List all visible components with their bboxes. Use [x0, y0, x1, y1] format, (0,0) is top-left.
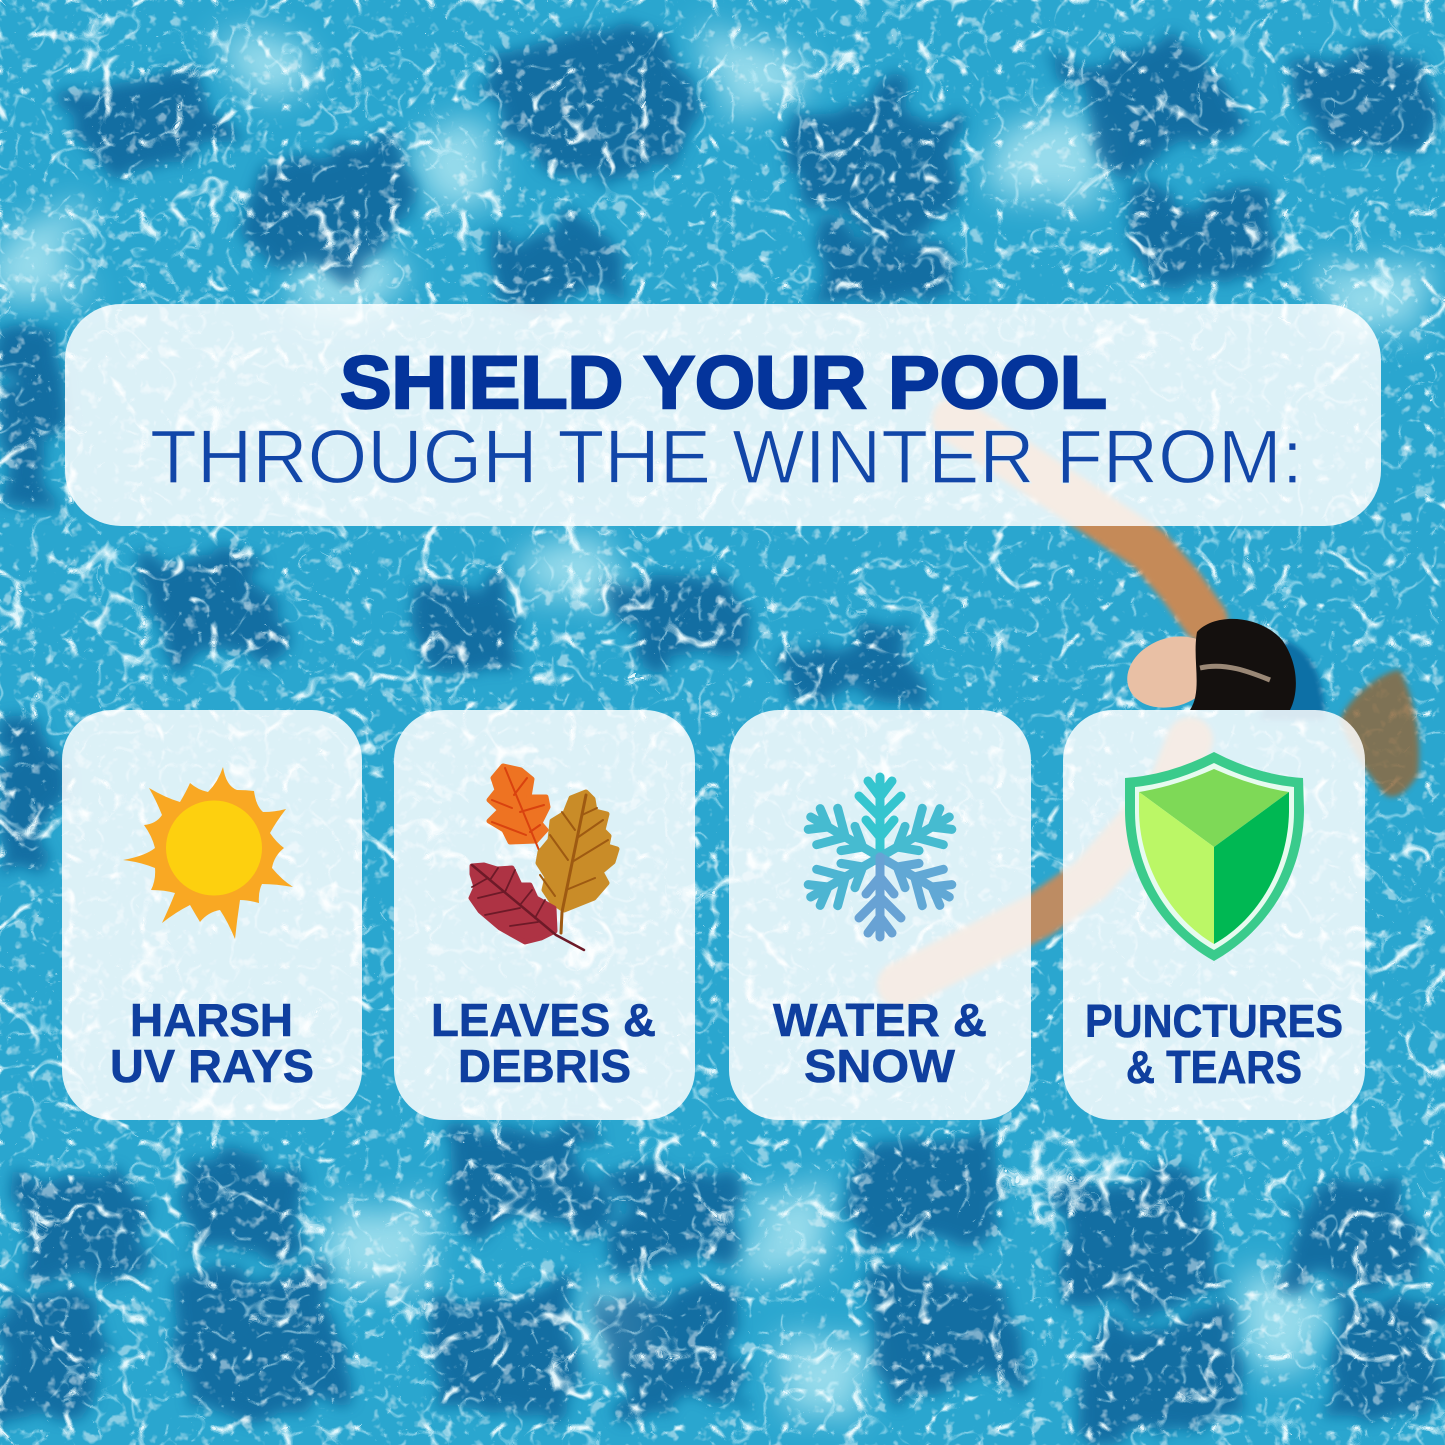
- label: water and snow: WATER &: [773, 994, 987, 1046]
- panel: water and snow: [729, 710, 1031, 1120]
- heading: shield your pool: SHIELD YOUR POOL: [340, 341, 1107, 424]
- panel: harsh uv rays: [62, 710, 362, 1120]
- label: harsh uv rays: HARSH: [130, 994, 293, 1046]
- label: punctures and tears: [1085, 995, 1343, 1093]
- label: leaves and debris: DEBRIS: [458, 1040, 631, 1092]
- panel: punctures and tears: [1063, 710, 1365, 1120]
- label: punctures and tears: PUNCTURES: [1085, 995, 1343, 1047]
- label: punctures and tears: & TEARS: [1126, 1041, 1302, 1093]
- swimmer upper arm: [955, 420, 1205, 620]
- label: harsh uv rays: [110, 994, 314, 1092]
- title panel: [65, 304, 1381, 526]
- orange leaf: [489, 766, 548, 855]
- swimmer face: [1117, 624, 1227, 720]
- red leaf: [471, 865, 584, 950]
- label: harsh uv rays: UV RAYS: [110, 1040, 314, 1092]
- swimmer hair highlights: [1200, 666, 1270, 680]
- panel: leaves and debris: [394, 710, 695, 1120]
- swimmer swimsuit and back: [1260, 640, 1325, 720]
- label: leaves and debris: [431, 994, 656, 1092]
- label: water and snow: SNOW: [804, 1040, 956, 1092]
- label: water and snow: [773, 994, 987, 1092]
- gold leaf: [538, 792, 617, 933]
- swimmer floating hair: [1340, 670, 1419, 797]
- icon: autumn leaves: [471, 766, 617, 950]
- icon: snowflake: [800, 777, 960, 937]
- swimmer lower arm: [900, 740, 1190, 985]
- swimmer: [900, 420, 1419, 985]
- heading: through the winter from: THROUGH THE WINTER FROM:: [150, 415, 1303, 500]
- swimmer dark hair: [1190, 619, 1296, 710]
- label: leaves and debris: LEAVES &: [431, 994, 656, 1046]
- icon: sun: [123, 767, 293, 939]
- icon: shield: [1125, 752, 1304, 961]
